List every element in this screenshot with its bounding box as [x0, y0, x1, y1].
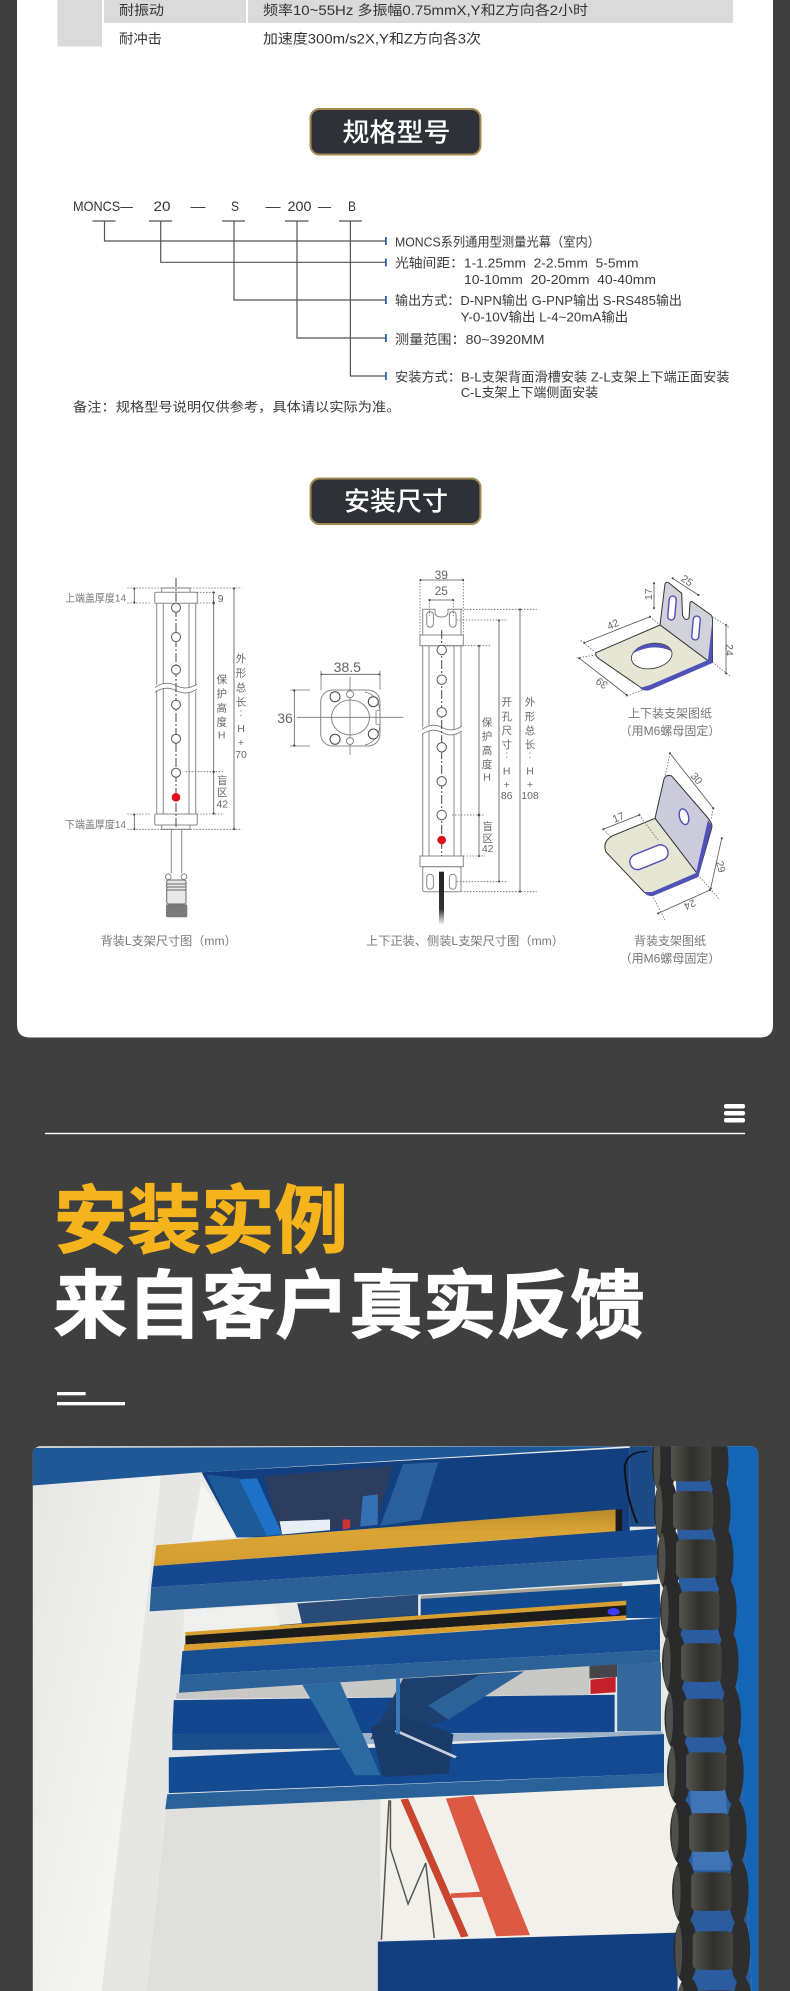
drawing: top/bottom and side mount L bracket dimensions: [366, 568, 564, 948]
light curtain rail 1: [154, 1509, 622, 1566]
panel: white specification card: [17, 0, 773, 1038]
dimension labels: :: [240, 707, 242, 719]
dimension labels: +: [238, 737, 244, 749]
option descriptions: [395, 234, 730, 400]
model code string: B: [348, 198, 356, 214]
dimension labels: 外: [236, 653, 247, 665]
caption: 背装支架图纸: [634, 934, 706, 948]
model code string: 200: [288, 198, 312, 214]
model code string: —: [266, 198, 280, 214]
dimension labels: 长: [525, 739, 536, 751]
dimension lines: [420, 580, 537, 892]
drawing: end view of the bracket: 36: [277, 710, 293, 726]
dimension labels: 保: [482, 716, 493, 729]
dimension labels: 上端盖厚度14: [65, 592, 126, 604]
dimension labels: 区: [217, 787, 228, 799]
dimension labels: H: [237, 723, 245, 735]
dimension labels: 盲: [482, 820, 493, 833]
caption: [620, 706, 720, 738]
blue beam 2: [179, 1618, 660, 1693]
dimension labels: H: [503, 766, 510, 778]
dimension labels: [65, 592, 247, 831]
dimension labels: H: [526, 766, 534, 778]
specification table: 耐振动: [119, 3, 164, 18]
dimension labels: 108: [521, 790, 539, 802]
dimension labels: 70: [235, 749, 247, 761]
remark note: 备注：规格型号说明仅供参考，具体请以实际为准。: [73, 400, 400, 414]
dimension labels: 盲: [217, 774, 228, 787]
caption: 背装L支架尺寸图（mm）: [101, 934, 237, 948]
cable: [439, 872, 444, 925]
model code string: —: [318, 198, 331, 214]
dimension labels: 42: [216, 798, 228, 810]
drawing: end view of the bracket: 38.5: [334, 659, 361, 675]
decorative title marks: [57, 1392, 125, 1405]
option descriptions: Y-0-10V输出 L-4~20mA输出: [461, 310, 628, 324]
dimension labels: :: [529, 749, 531, 761]
drawing: top/bottom bracket isometric: 25: [678, 573, 695, 589]
option descriptions: 输出方式：D-NPN输出 G-PNP输出 S-RS485输出: [395, 293, 682, 308]
heading button: 规格型号: 规格型号: [342, 118, 450, 148]
dimension labels: 度: [216, 716, 227, 728]
model code string: S: [231, 198, 239, 214]
drawing: top/bottom bracket isometric: 39: [594, 674, 610, 691]
caption: [620, 934, 720, 966]
dimension lines: [127, 588, 242, 829]
blue beam 1: [150, 1528, 657, 1611]
dimension labels: +: [504, 779, 510, 791]
dimension labels: 护: [216, 687, 227, 700]
model code diagram: [73, 198, 730, 414]
roller chain: [652, 1429, 753, 1991]
model code string: [73, 198, 356, 214]
heading button: 安装尺寸: [310, 478, 480, 524]
dimension labels: 高: [216, 702, 227, 714]
section header rule and menu icon: [45, 1104, 745, 1134]
option descriptions: C-L支架上下端侧面安装: [461, 385, 598, 400]
dimension labels: 度: [482, 758, 493, 771]
option descriptions: 测量范围：80~3920MM: [395, 332, 544, 347]
sensor bar body: [152, 578, 200, 829]
dimension labels: 25: [435, 584, 448, 598]
caption: 上下正装、侧装L支架尺寸图（mm）: [366, 934, 564, 948]
title: 安装实例: 安装实例: [54, 1180, 348, 1262]
blue tick marks: [385, 237, 387, 380]
dimension labels: 长: [236, 696, 247, 708]
dimension labels: H: [483, 772, 491, 784]
dimension labels: 39: [435, 568, 448, 582]
dimension labels: 86: [501, 790, 513, 802]
option descriptions: 安装方式：B-L支架背面滑槽安装 Z-L支架上下端正面安装: [395, 370, 730, 384]
caption: （用M6螺母固定）: [620, 950, 720, 966]
specification table: 加速度300m/s2X,Y和Z方向各3次: [263, 32, 481, 46]
drawing: back-mount bracket isometric: [603, 753, 728, 966]
light curtain rail 2 with indicator: [184, 1601, 626, 1651]
heading button: 规格型号: [310, 109, 480, 154]
caption: （用M6螺母固定）: [620, 723, 720, 738]
dimension labels: H: [218, 730, 225, 742]
drawing: back-mount bracket isometric: 24: [682, 896, 697, 912]
diagonal braces and cylinder: [302, 1672, 524, 1777]
dimension labels: 区: [482, 833, 493, 845]
drawing: back-mount bracket isometric: 29: [713, 860, 728, 874]
cable and connector: [166, 829, 187, 917]
drawing: end view of the bracket: [277, 659, 403, 755]
dimension labels: 形: [525, 711, 536, 723]
mid gap details: [280, 1583, 660, 1630]
heading button: 安装尺寸: 安装尺寸: [344, 486, 448, 516]
dimension labels: 形: [236, 668, 247, 680]
red structure in background: [381, 1796, 530, 1940]
blue base block: [378, 1933, 678, 1991]
sensor bar body: [420, 609, 464, 892]
caption: 上下装支架图纸: [628, 706, 712, 720]
dimension labels: 护: [482, 730, 492, 742]
drawing: top/bottom bracket isometric: [576, 573, 735, 738]
specification table: [58, 0, 733, 46]
blue beam 3: [165, 1734, 664, 1809]
specification table: 耐冲击: [119, 32, 162, 46]
option descriptions: 光轴间距：1-1.25mm 2-2.5mm 5-5mm: [395, 256, 638, 270]
drawing: back-mount bracket isometric: 30: [688, 770, 705, 787]
white wall panels: [32, 1482, 380, 1991]
dimension labels: 42: [482, 843, 494, 855]
option descriptions: MONCS系列通用型测量光幕（室内）: [395, 234, 600, 250]
dimension labels: [435, 568, 539, 855]
drawing: back-mount L bracket dimensions: [65, 578, 247, 948]
drawing: top/bottom bracket isometric: 24: [723, 644, 735, 656]
dimension labels: 总: [236, 681, 247, 694]
dimension labels: +: [527, 779, 533, 791]
dimension labels: 孔: [501, 710, 512, 723]
drawing: back-mount bracket isometric: 17: [611, 810, 626, 826]
title: 来自客户真实反馈: 来自客户真实反馈: [54, 1264, 644, 1348]
dimension labels: 外: [525, 696, 536, 708]
drawing: top/bottom bracket isometric: 42: [605, 617, 621, 633]
specification table: 频率10~55Hz 多振幅0.75mmX,Y和Z方向各2小时: [263, 2, 588, 18]
model code string: MONCS—: [73, 198, 133, 214]
dimension labels: 寸: [501, 738, 512, 751]
icon: hamburger menu: [724, 1104, 745, 1122]
dimension labels: 下端盖厚度14: [65, 818, 126, 831]
dimension labels: 高: [482, 744, 492, 757]
model code string: 20: [154, 198, 171, 214]
upper blue frame: [33, 1446, 655, 1537]
connector lines: [92, 221, 385, 376]
dimension labels: 9: [218, 593, 224, 605]
drawing: top/bottom bracket isometric: 17: [643, 588, 655, 600]
model code string: —: [190, 198, 206, 214]
dimension labels: 开: [501, 696, 512, 708]
dimension labels: 保: [216, 673, 227, 686]
dimension labels: 尺: [501, 725, 512, 737]
lower frame background: [171, 1663, 662, 1756]
photo: installed light curtain on blue lift frame: [33, 1429, 758, 1991]
dimension labels: :: [505, 749, 508, 761]
option descriptions: 10-10mm 20-20mm 40-40mm: [464, 272, 656, 287]
right blue panel and backdrop: [675, 1446, 758, 1991]
dimension labels: 总: [525, 724, 536, 737]
